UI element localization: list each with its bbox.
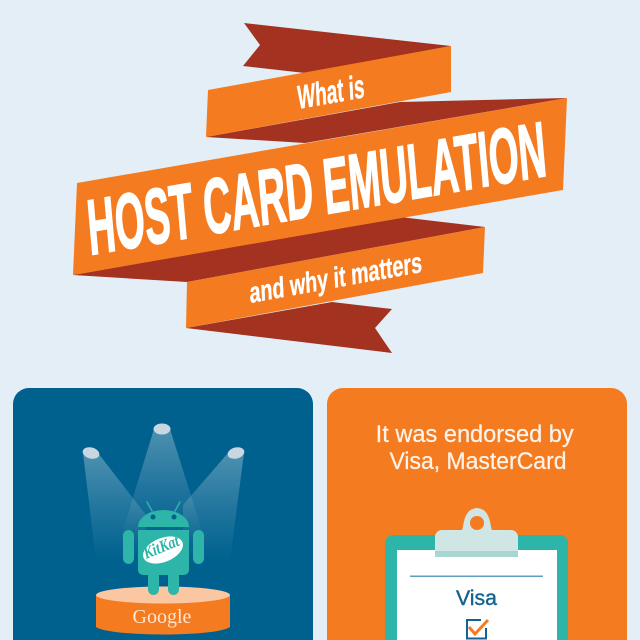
panel: Android KitKat: [13, 388, 313, 640]
icon: checked box: [467, 620, 488, 638]
clipboard clip: [435, 508, 518, 557]
title ribbon: [73, 23, 567, 353]
KitKat badge: KitKat: [140, 531, 183, 563]
checklist label: Visa: Visa: [456, 587, 497, 610]
heading: and why it matters: and why it matters: [249, 247, 423, 310]
ribbon upper fold: [206, 98, 567, 143]
panel: endorsement: [327, 388, 627, 640]
panel background: [327, 388, 627, 640]
ribbon top tail: [243, 23, 451, 73]
pedestal: [96, 586, 230, 634]
ribbon band: What is: [206, 46, 451, 137]
panel heading: Visa, MasterCard: [390, 448, 566, 475]
panel heading: It was endorsed by: [376, 421, 574, 448]
heading: What is: What is: [297, 67, 365, 116]
spotlight beams: [83, 429, 244, 560]
icon: Android robot: [123, 502, 204, 595]
ribbon band: main title: [73, 98, 567, 275]
ribbon bottom tail: [186, 302, 392, 353]
pedestal label: Google: Google: [133, 606, 192, 628]
ribbon band: and why it matters: [186, 227, 485, 328]
ribbon lower fold: [73, 217, 485, 282]
spotlight lamps: [81, 424, 246, 461]
icon: clipboard: [385, 508, 568, 640]
panel background: [13, 388, 313, 640]
